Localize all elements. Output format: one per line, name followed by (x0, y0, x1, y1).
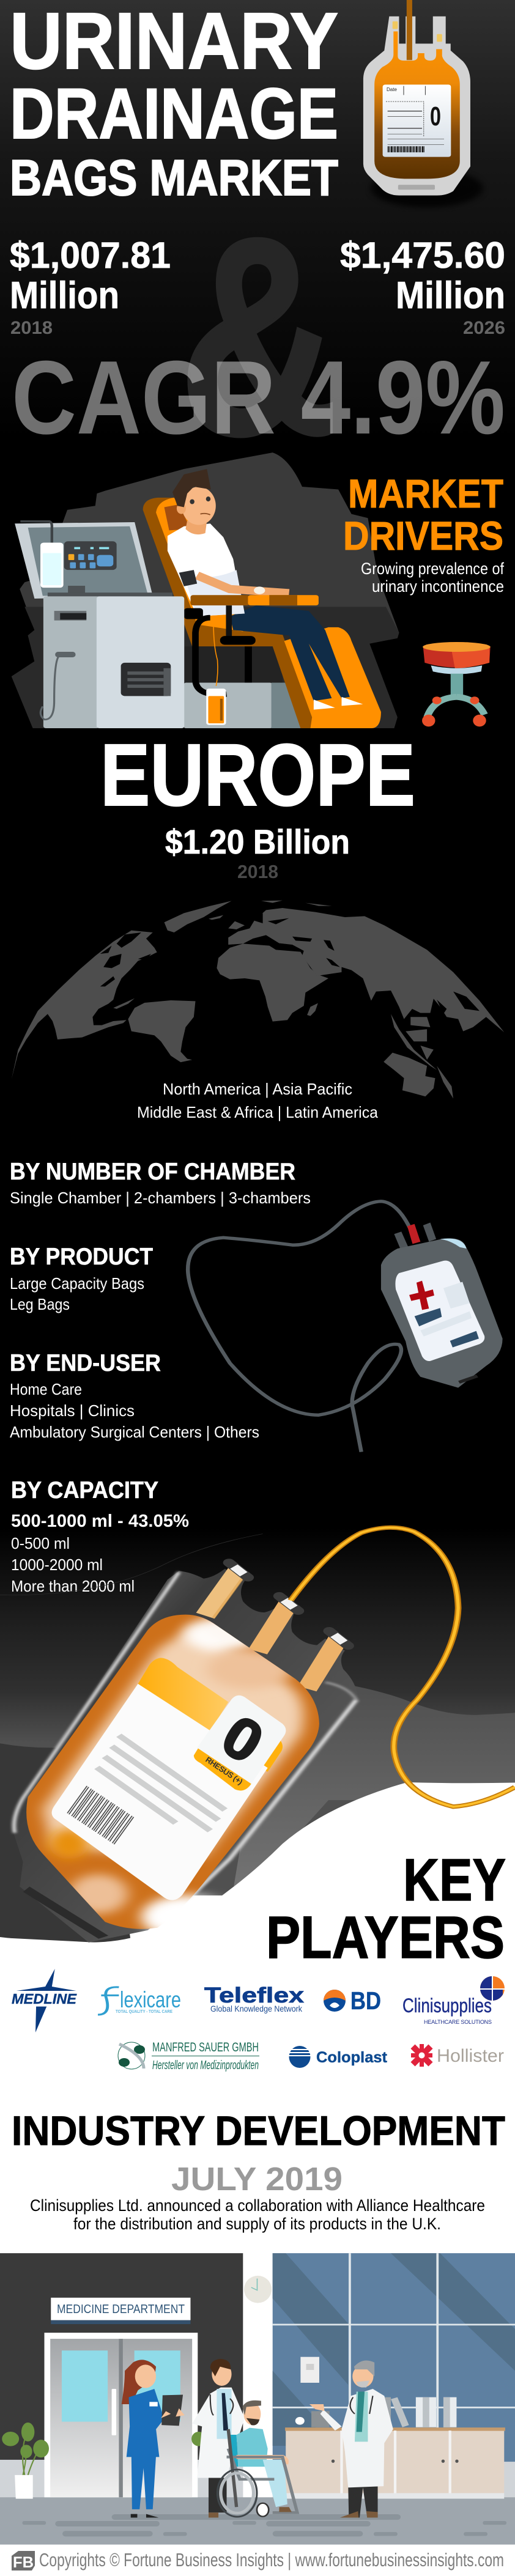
logo: Teleflex: Teleflex (204, 1984, 305, 2007)
value 2018: $1,007.81 (10, 235, 171, 276)
segment: number of chamber (10, 1159, 311, 1207)
sign (51, 2298, 190, 2320)
illustration: patient in chair (12, 452, 491, 728)
logo: Teleflex: Global Knowledge Network (210, 2004, 303, 2013)
value 2026 (340, 235, 505, 338)
value 2018: 2018 (10, 318, 53, 338)
logo: BD: BD (350, 1987, 381, 2015)
other regions: North America | Asia Pacific (163, 1080, 352, 1098)
logo: Clinisupplies: Clinisupplies (402, 1995, 492, 2017)
segment: product: BY PRODUCT (10, 1244, 153, 1270)
gold tube (291, 1527, 515, 1807)
doctor two (352, 2365, 374, 2388)
segment: product: Large Capacity Bags (10, 1274, 144, 1293)
footer logo: FB (13, 2554, 34, 2571)
poster (300, 2357, 319, 2383)
logo: Clinisupplies (402, 1976, 505, 2025)
bag label text: Date (387, 87, 397, 92)
wheelchair (227, 2449, 297, 2512)
segment: end-user: BY END-USER (10, 1350, 161, 1376)
segment: product (10, 1244, 153, 1313)
segment: capacity: More than 2000 ml (11, 1577, 135, 1595)
logo: Hollister: Hollister (437, 2046, 504, 2066)
logo: Manfred Sauer (118, 2040, 259, 2072)
region heading: 2018 (237, 861, 278, 882)
illustration: small grey bag and tube (188, 1201, 503, 1452)
logo: Coloplast (289, 2046, 388, 2068)
ampersand watermark: & (179, 180, 338, 493)
cabinets (286, 2430, 504, 2493)
segment: number of chamber: BY NUMBER OF CHAMBER (10, 1159, 295, 1185)
illustration: hospital scene (0, 2253, 515, 2545)
value 2026: $1,475.60 (340, 235, 505, 276)
sign text: MEDICINE DEPARTMENT (57, 2303, 185, 2316)
segment: end-user: Ambulatory Surgical Centers | Others (10, 1423, 259, 1441)
value 2026: 2026 (463, 318, 505, 338)
plant (23, 2432, 39, 2475)
segment: capacity (11, 1477, 189, 1595)
segment: capacity: 0-500 ml (11, 1534, 70, 1552)
logo: Medline (12, 1969, 77, 2032)
title (10, 0, 338, 206)
market drivers (343, 471, 504, 596)
background: dark upper section (0, 0, 515, 440)
segment: end-user (10, 1350, 259, 1441)
industry development: for the distribution and supply of its products in the U.K. (73, 2215, 441, 2233)
sticker rhesus label: RHESUS (+) (204, 1755, 245, 1787)
illustration: large drainage bag (13, 1527, 515, 1943)
region heading: EUROPE (100, 726, 415, 824)
industry development (12, 2108, 505, 2233)
logo: Flexicare: lexicare (120, 1987, 181, 2012)
industry development: JULY 2019 (171, 2161, 343, 2198)
logo: Coloplast: Coloplast (316, 2049, 388, 2066)
value 2026: Million (396, 275, 505, 317)
logo: Manfred Sauer: MANFRED SAUER GMBH (152, 2040, 259, 2054)
logo: Medline: MEDLINE (12, 1991, 77, 2007)
monitor (15, 522, 153, 599)
background: gradient behind large bag (0, 1504, 515, 1895)
logo: Manfred Sauer: Hersteller von Medizinprodukten (152, 2059, 259, 2072)
door (44, 2333, 198, 2497)
patient (243, 2403, 261, 2425)
logo: Clinisupplies: HEALTHCARE SOLUTIONS (424, 2019, 492, 2025)
logo: Flexicare (98, 1987, 181, 2015)
key players heading (266, 1847, 506, 1971)
region heading (100, 726, 415, 882)
nurse (122, 2360, 156, 2404)
segment: capacity: 1000-2000 ml (11, 1556, 103, 1574)
bag blood group: 0 (430, 101, 441, 131)
world map (12, 901, 504, 1099)
other regions (137, 1080, 379, 1121)
floor bag (206, 688, 226, 725)
logo: Teleflex (204, 1984, 305, 2013)
segment: end-user: Home Care (10, 1380, 82, 1398)
title: DRAINAGE (10, 73, 338, 153)
segment: number of chamber: Single Chamber | 2-chambers | 3-chambers (10, 1189, 311, 1207)
armrest (190, 595, 250, 605)
value 2018 (10, 235, 171, 338)
background: black middle section (0, 440, 515, 1516)
binders (416, 2397, 456, 2427)
clock (244, 2276, 272, 2303)
segment: capacity: BY CAPACITY (11, 1477, 158, 1504)
other regions: Middle East & Africa | Latin America (137, 1103, 379, 1121)
value 2018: Million (10, 275, 119, 317)
title: BAGS MARKET (10, 149, 338, 206)
segment: capacity: 500-1000 ml - 43.05% (11, 1511, 189, 1531)
stool (423, 646, 491, 668)
logo: Hollister (411, 2044, 504, 2067)
sticker blood group: 0 (211, 1702, 275, 1776)
segment: product: Leg Bags (10, 1295, 70, 1313)
logo: Flexicare: TOTAL QUALITY - TOTAL CARE (116, 2010, 172, 2014)
wave backdrop and white section (0, 1534, 515, 1953)
chair (143, 498, 312, 728)
machine (43, 596, 99, 728)
segment: end-user: Hospitals | Clinics (10, 1401, 135, 1420)
logo: BD (324, 1987, 381, 2015)
person (230, 605, 350, 701)
doctor one (212, 2363, 232, 2386)
icon: urine bag top (363, 0, 483, 207)
region heading: $1.20 Billion (165, 822, 350, 861)
